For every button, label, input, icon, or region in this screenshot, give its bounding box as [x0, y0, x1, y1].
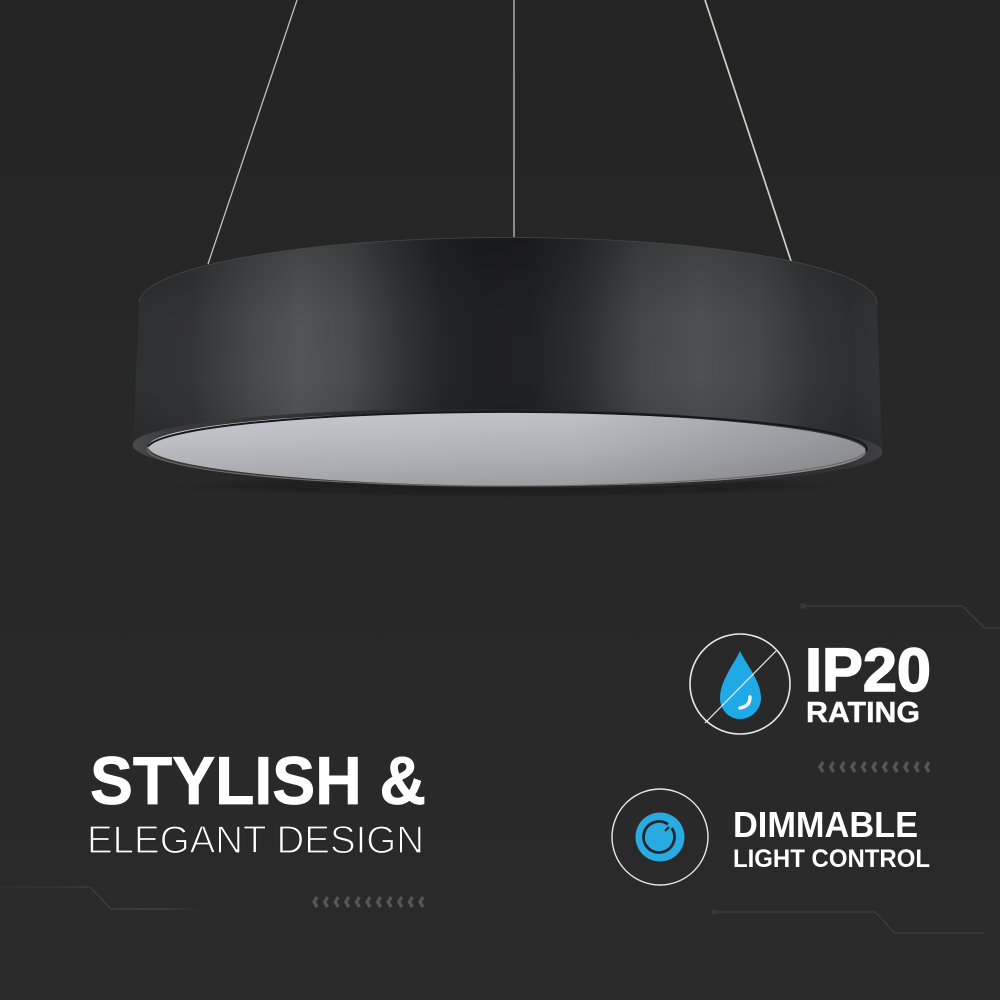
lamp shadow — [170, 475, 850, 497]
decorative circuit line: bottom right — [711, 909, 985, 933]
heading: stylish: STYLISH & — [90, 743, 426, 819]
icon: IP20 water drop — [690, 634, 790, 734]
diffuser shading — [148, 409, 866, 489]
lamp body shading — [133, 237, 882, 450]
label: rating: RATING — [806, 697, 920, 729]
label: IP20: IP20 — [805, 636, 931, 704]
decorative circuit line: left — [0, 887, 200, 909]
diffuser lower edge — [147, 446, 866, 486]
label: dimmable: DIMMABLE — [733, 804, 918, 845]
lamp body — [133, 237, 882, 450]
icon: dimmer dial — [612, 789, 708, 885]
pendant lamp — [132, 0, 883, 497]
lamp diffuser — [148, 409, 866, 489]
chevron row: right — [820, 762, 929, 772]
diffuser upper shadow line — [148, 412, 867, 452]
chevron row: left — [314, 897, 423, 907]
subheading: elegant design: ELEGANT DESIGN — [87, 819, 424, 862]
lamp lower rim — [132, 405, 883, 492]
decorative circuit line: top right — [800, 603, 1000, 628]
label: light control: LIGHT CONTROL — [733, 845, 930, 873]
suspension wires — [208, 0, 792, 264]
lamp top edge highlight — [139, 237, 877, 305]
